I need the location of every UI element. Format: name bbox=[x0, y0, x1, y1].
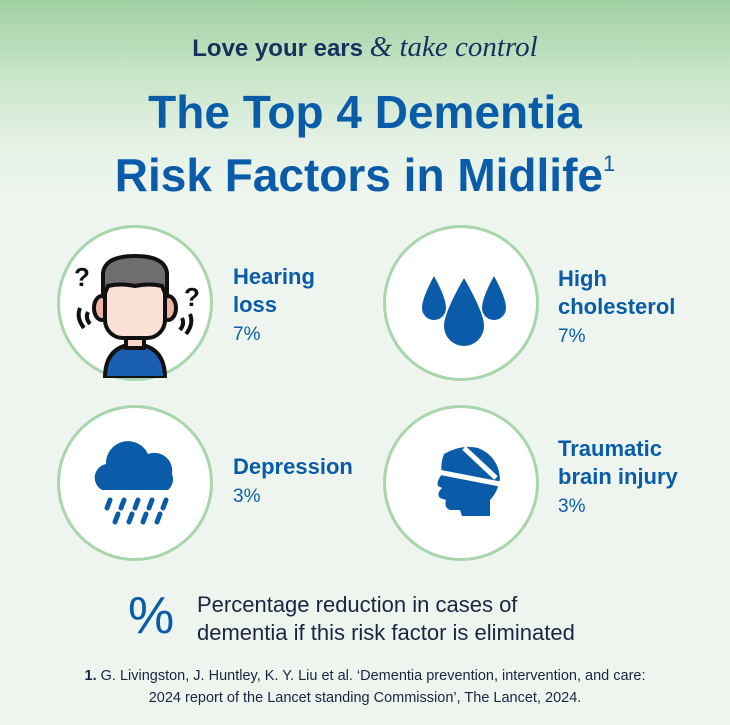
panel: traumatic brain injury bbox=[383, 405, 678, 561]
footnote: 1. G. Livingston, J. Huntley, K. Y. Liu et al. ‘Dementia prevention, intervention, and care: bbox=[84, 668, 645, 684]
title: Risk Factors in Midlife1 bbox=[115, 149, 615, 201]
footnote bbox=[84, 668, 645, 706]
label: depression: Depression bbox=[233, 454, 353, 479]
label: traumatic brain injury: 3% bbox=[558, 496, 585, 517]
legend text bbox=[197, 592, 575, 645]
icon: person confused: ? bbox=[74, 262, 90, 292]
footnote: 2024 report of the Lancet standing Commission’, The Lancet, 2024. bbox=[149, 690, 581, 706]
panel: depression bbox=[57, 405, 353, 561]
label: high cholesterol: cholesterol bbox=[558, 294, 675, 319]
legend text: dementia if this risk factor is eliminated bbox=[197, 620, 575, 645]
legend text: Percentage reduction in cases of bbox=[197, 592, 517, 617]
label: depression bbox=[233, 454, 353, 507]
label: hearing loss: loss bbox=[233, 292, 277, 317]
title: The Top 4 Dementia bbox=[148, 86, 582, 138]
label: traumatic brain injury bbox=[558, 436, 678, 517]
label: high cholesterol: High bbox=[558, 266, 607, 291]
title bbox=[115, 86, 615, 201]
label: depression: 3% bbox=[233, 486, 260, 507]
panel: high cholesterol bbox=[383, 225, 675, 381]
icon: rain cloud bbox=[57, 405, 213, 561]
label: high cholesterol: 7% bbox=[558, 326, 585, 347]
label: traumatic brain injury: Traumatic bbox=[558, 436, 662, 461]
icon: person confused: ? bbox=[184, 282, 200, 312]
tagline: Love your ears & take control bbox=[192, 31, 538, 63]
legend bbox=[128, 587, 575, 645]
icon: percent: % bbox=[128, 587, 174, 645]
label: traumatic brain injury: brain injury bbox=[558, 464, 678, 489]
icon: bandaged head bbox=[383, 405, 539, 561]
label: high cholesterol bbox=[558, 266, 675, 347]
label: hearing loss: Hearing bbox=[233, 264, 315, 289]
label: hearing loss: 7% bbox=[233, 324, 260, 345]
label: hearing loss bbox=[233, 264, 315, 345]
icon: person confused bbox=[57, 225, 213, 381]
icon: drops bbox=[383, 225, 539, 381]
panel: hearing loss bbox=[57, 225, 315, 381]
